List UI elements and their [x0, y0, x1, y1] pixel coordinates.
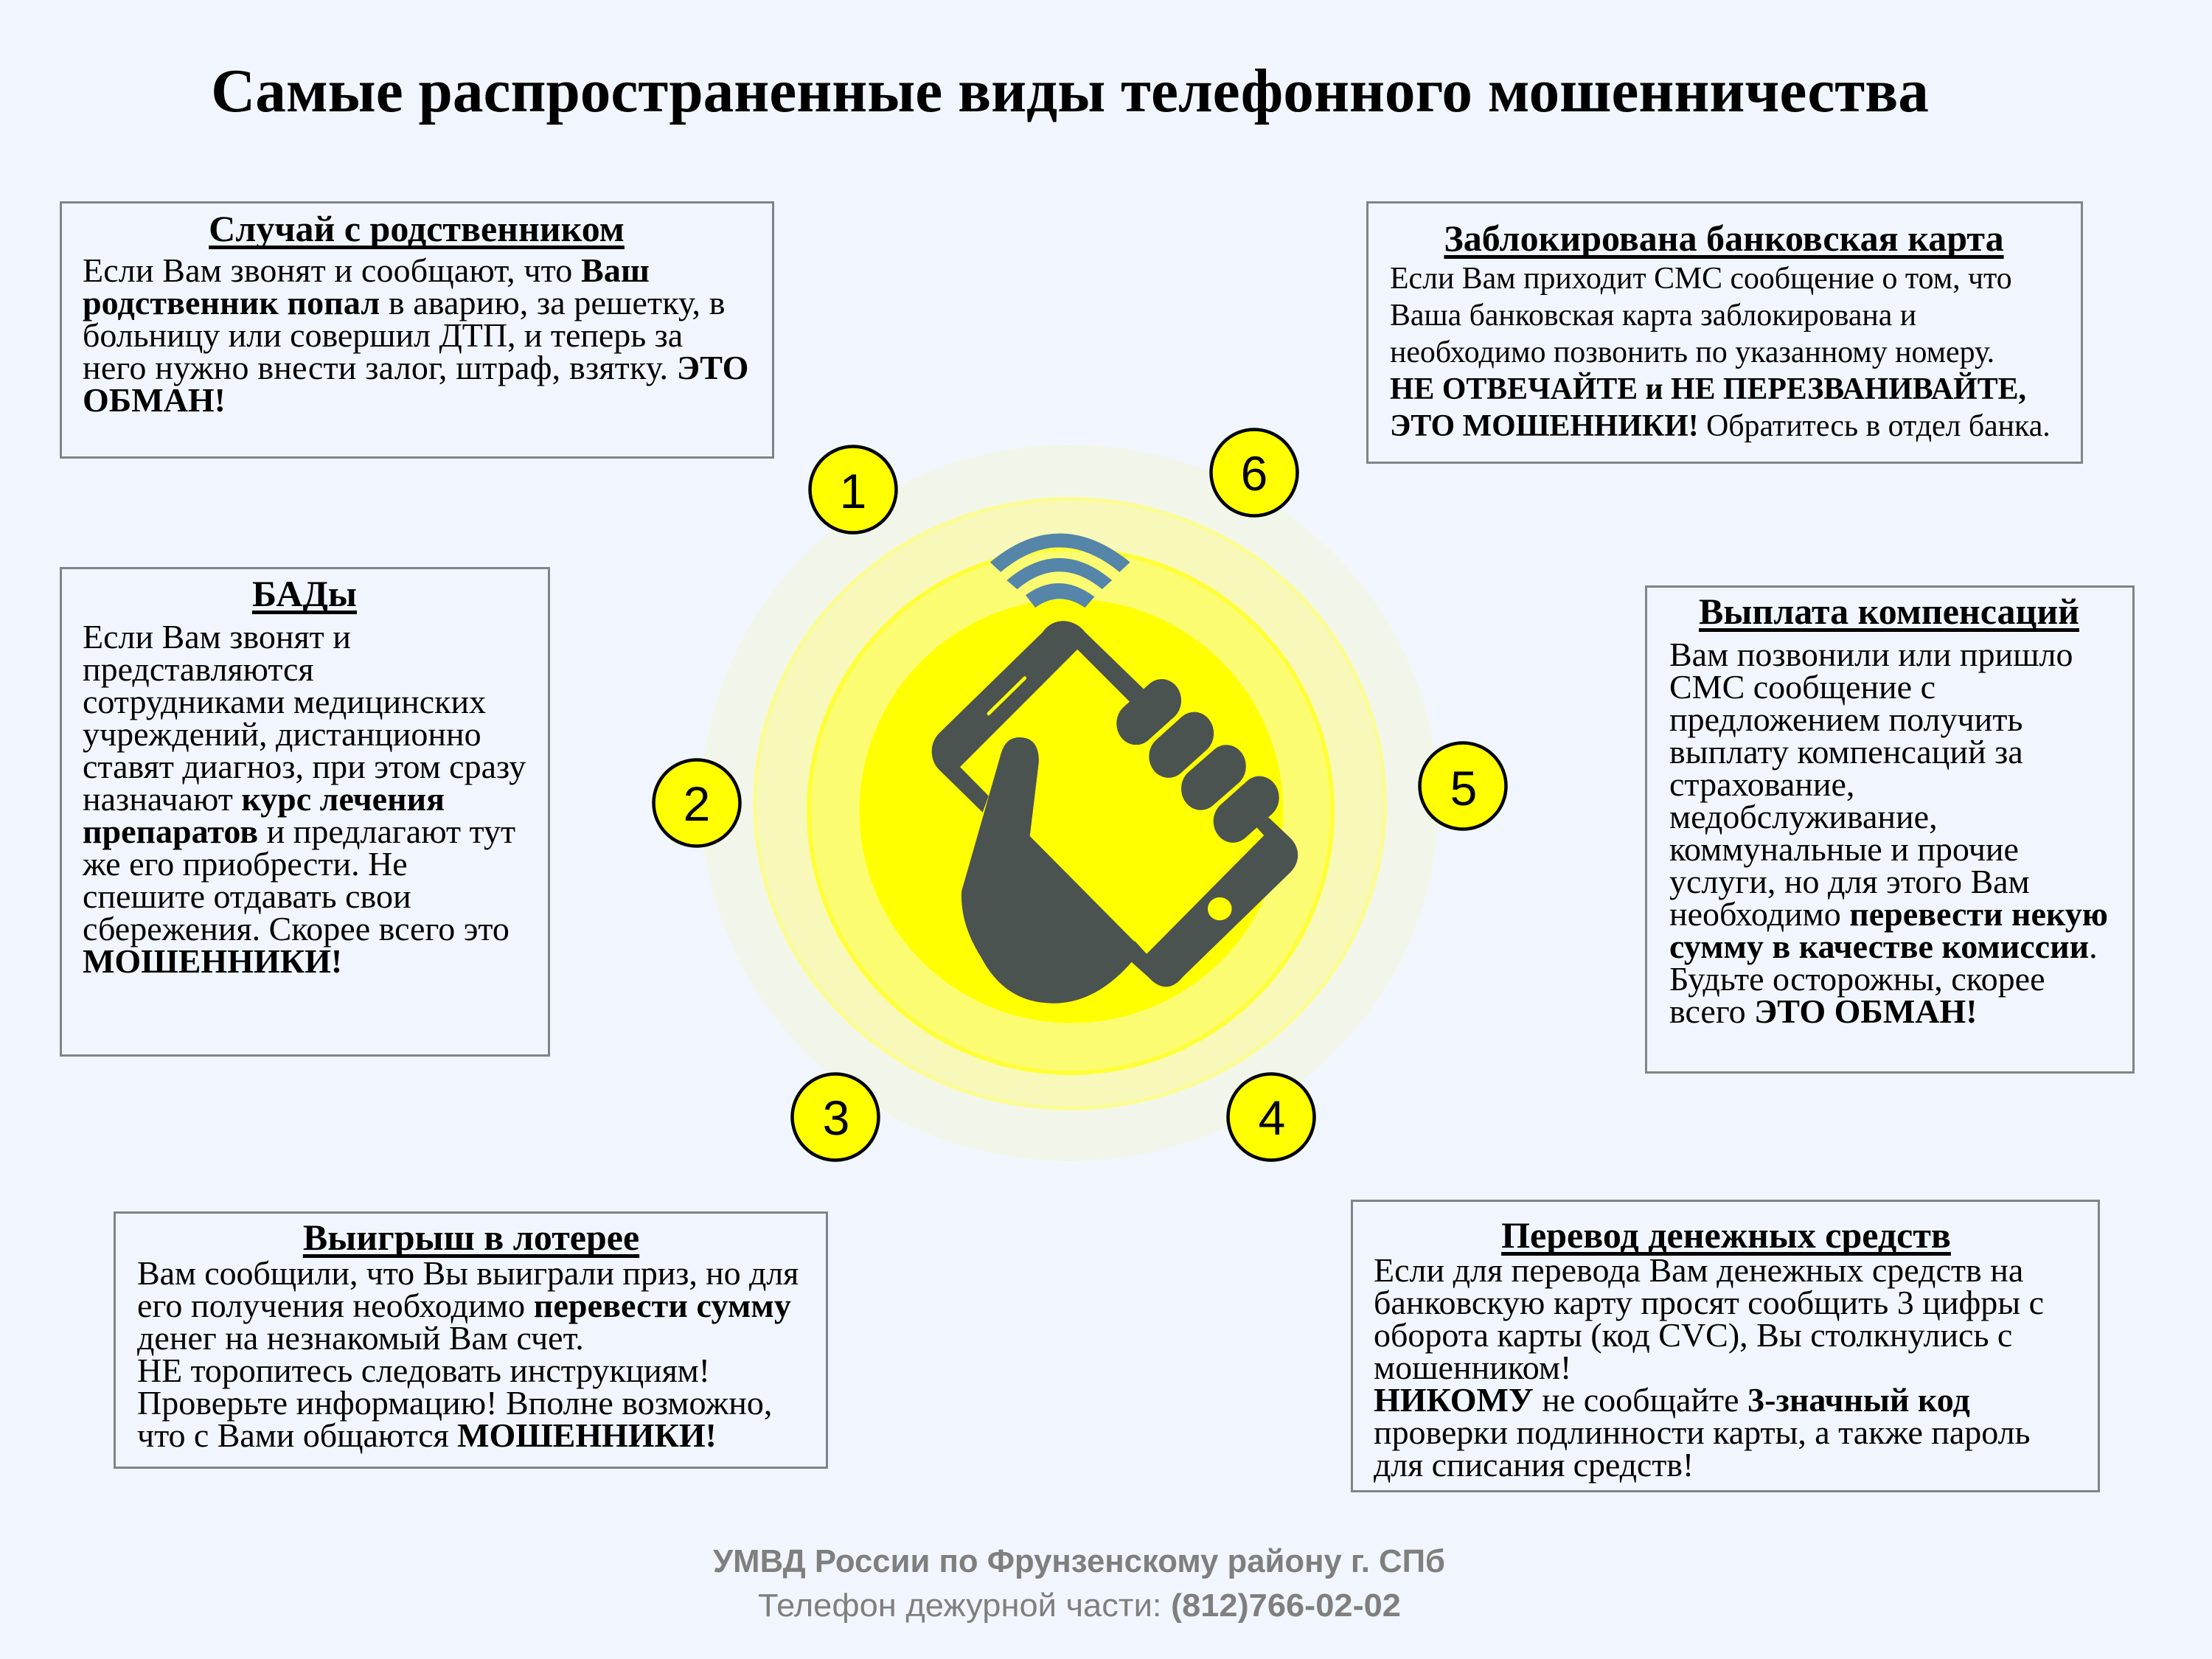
- body text: [1669, 636, 2108, 1029]
- concentric glow circles: [701, 445, 1439, 1161]
- body text: спешите отдавать свои: [83, 877, 411, 914]
- title: Самые распространенные виды телефонного мошенничества: [211, 58, 1929, 125]
- panel 4: money transfer: [1351, 1200, 2100, 1492]
- body text: ОБМАН!: [83, 380, 226, 419]
- heading: Перевод денежных средств: [1501, 1214, 1951, 1256]
- body text: денег на незнакомый Вам счет.: [137, 1318, 584, 1357]
- body text: [137, 1253, 799, 1454]
- body text: назначают курс лечения: [83, 780, 445, 817]
- body text: СМС сообщение с: [1669, 668, 1935, 705]
- number badges 1-6: [653, 429, 1506, 1161]
- body text: Вам сообщили, что Вы выиграли приз, но для: [137, 1253, 799, 1292]
- body text: услуги, но для этого Вам: [1669, 863, 2030, 900]
- body text: Вам позвонили или пришло: [1669, 636, 2073, 672]
- body text: препаратов и предлагают тут: [83, 813, 515, 849]
- panel 6: blocked bank card: [1366, 201, 2083, 464]
- body text: НЕ торопитесь следовать инструкциям!: [137, 1351, 710, 1389]
- body text: необходимо перевести некую: [1669, 895, 2108, 932]
- number badges 1-6: 3: [823, 1091, 849, 1145]
- panel 3: lottery win: [114, 1211, 828, 1469]
- number badges 1-6: 6: [1241, 446, 1267, 501]
- body text: коммунальные и прочие: [1669, 830, 2019, 867]
- body text: Если Вам звонят и: [83, 618, 351, 655]
- body text: НИКОМУ не сообщайте 3-значный код: [1374, 1380, 1970, 1419]
- body text: МОШЕННИКИ!: [83, 942, 342, 979]
- heading: БАДы: [252, 573, 357, 614]
- body text: [1390, 262, 2051, 443]
- heading: Выигрыш в лотерее: [303, 1217, 639, 1258]
- icon: hand holding smartphone: [932, 621, 1298, 1004]
- body text: [83, 251, 749, 419]
- body text: всего ЭТО ОБМАН!: [1669, 992, 1978, 1029]
- number badges 1-6: 4: [1259, 1091, 1285, 1145]
- body text: ставят диагноз, при этом сразу: [83, 748, 526, 785]
- body text: сумму в качестве комиссии.: [1669, 928, 2098, 964]
- icon: wifi signal: [990, 533, 1130, 608]
- body text: Ваша банковская карта заблокирована и: [1390, 299, 1916, 333]
- body text: учреждений, дистанционно: [83, 715, 481, 752]
- body text: Проверьте информацию! Вполне возможно,: [137, 1383, 772, 1422]
- body text: банковскую карту просят сообщить 3 цифры с: [1374, 1283, 2044, 1321]
- body text: страхование,: [1669, 765, 1854, 802]
- body text: его получения необходимо перевести сумму: [137, 1286, 791, 1324]
- body text: что с Вами общаются МОШЕННИКИ!: [137, 1416, 717, 1454]
- number badges 1-6: 1: [840, 464, 866, 518]
- footer: department and phone: [713, 1543, 1445, 1624]
- body text: оборота карты (код CVC), Вы столкнулись с: [1374, 1315, 2012, 1354]
- heading: Заблокирована банковская карта: [1444, 218, 2004, 259]
- body text: НЕ ОТВЕЧАЙТЕ и НЕ ПЕРЕЗВАНИВАЙТЕ,: [1390, 372, 2026, 406]
- body text: [1374, 1251, 2044, 1484]
- body text: Будьте осторожны, скорее: [1669, 960, 2045, 997]
- body text: ЭТО МОШЕННИКИ! Обратитесь в отдел банка.: [1390, 409, 2051, 443]
- footer: department and phone: УМВД России по Фрунзенскому району г. СПб: [713, 1543, 1445, 1579]
- body text: больницу или совершил ДТП, и теперь за: [83, 316, 683, 354]
- body text: сбережения. Скорее всего это: [83, 910, 509, 947]
- number badges 1-6: 2: [684, 776, 710, 831]
- body text: Если Вам звонят и сообщают, что Ваш: [83, 251, 650, 289]
- body text: представляются: [83, 650, 314, 687]
- body text: [83, 618, 526, 979]
- body text: выплату компенсаций за: [1669, 733, 2023, 770]
- body text: сотрудниками медицинских: [83, 683, 486, 720]
- body text: него нужно внести залог, штраф, взятку. ЭТО: [83, 348, 749, 386]
- body text: Если для перевода Вам денежных средств на: [1374, 1251, 2023, 1289]
- panel 5: compensation payout: [1645, 585, 2135, 1074]
- heading: Случай с родственником: [209, 208, 625, 249]
- body text: для списания средств!: [1374, 1445, 1694, 1484]
- panel 2: dietary supplements: [60, 567, 550, 1057]
- heading: Выплата компенсаций: [1699, 591, 2079, 632]
- footer: department and phone: Телефон дежурной части: (812)766-02-02: [758, 1587, 1401, 1624]
- body text: мошенником!: [1374, 1348, 1571, 1386]
- body text: медобслуживание,: [1669, 798, 1938, 835]
- body text: предложением получить: [1669, 700, 2023, 737]
- body text: родственник попал в аварию, за решетку, в: [83, 283, 726, 321]
- body text: проверки подлинности карты, а также пароль: [1374, 1413, 2030, 1451]
- body text: необходимо позвонить по указанному номеру.: [1390, 335, 1994, 369]
- body text: же его приобрести. Не: [83, 845, 408, 882]
- number badges 1-6: 5: [1450, 761, 1477, 815]
- panel 1: relative in trouble: [60, 201, 774, 459]
- body text: Если Вам приходит СМС сообщение о том, что: [1390, 262, 2012, 296]
